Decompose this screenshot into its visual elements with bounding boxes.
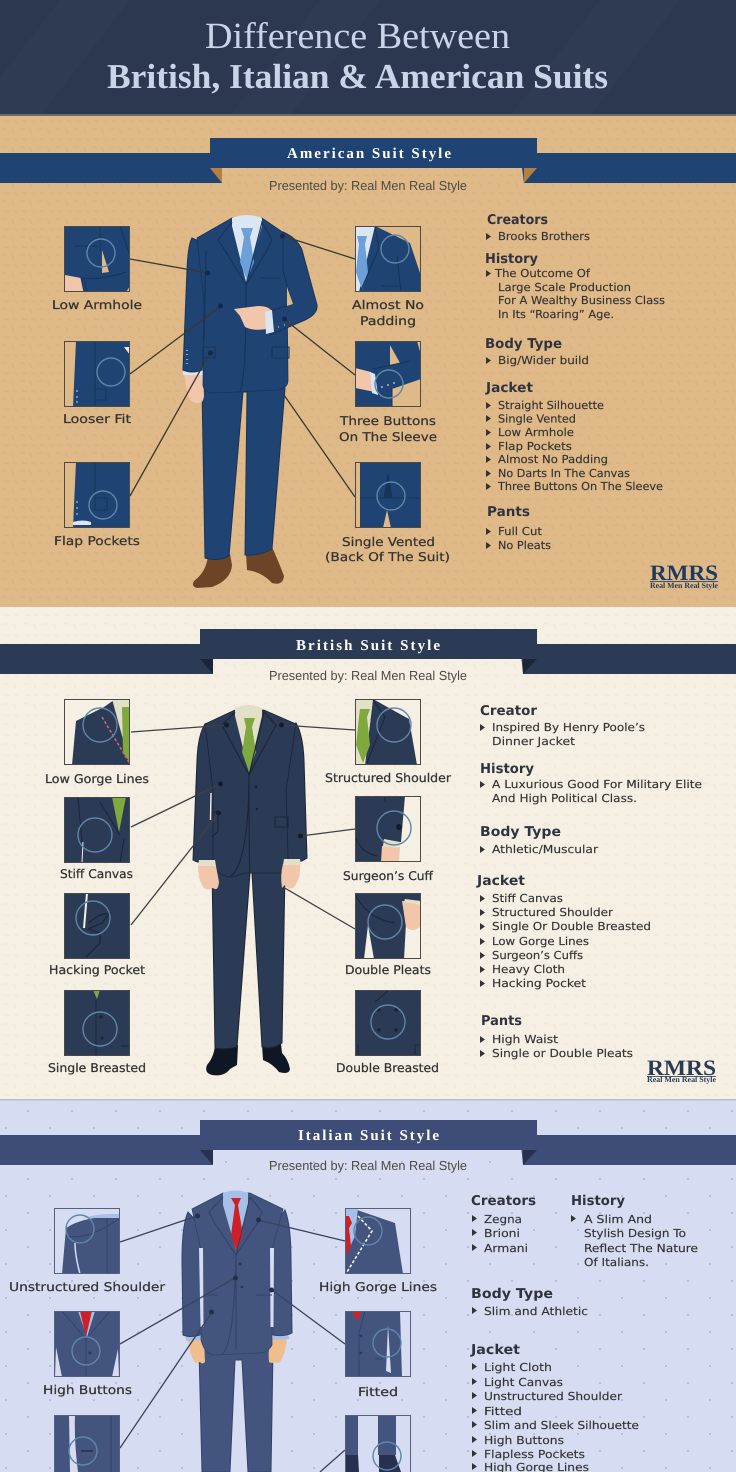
text column: British (476, 703, 702, 1060)
illustration: American suit (183, 215, 317, 588)
history: History (485, 251, 538, 267)
label: Three Buttons: On The Sleeve (339, 430, 437, 444)
ribbon: British: British Suit Style (296, 638, 440, 654)
logo: RMRS: RMRS (650, 560, 718, 585)
thumbnail: Looser Fit (64, 341, 130, 407)
thumbnail: Stiff Canvas (64, 797, 130, 863)
body type (480, 824, 599, 856)
thumbnail: Almost No Padding (355, 226, 421, 292)
thumbnail: Fitted (345, 1311, 411, 1377)
creator (480, 703, 645, 748)
label: Single Breasted: Single Breasted (48, 1061, 146, 1075)
thumbnail: Single Breasted (64, 990, 130, 1056)
ribbon: British (0, 629, 736, 674)
illustration: British suit (193, 705, 307, 1075)
jacket: Jacket (485, 380, 534, 396)
pants: No Pleats (498, 539, 551, 552)
jacket: Single Vented (498, 412, 576, 426)
presented by: Presented by: Real Men Real Style (269, 178, 467, 193)
pants: Pants (481, 1013, 522, 1029)
jacket (485, 380, 663, 493)
body type (471, 1286, 588, 1318)
pants: Full Cut (498, 525, 543, 538)
label: Hacking Pocket: Hacking Pocket (49, 963, 145, 977)
history: In Its “Roaring” Age. (498, 308, 614, 321)
body type: Big/Wider build (498, 354, 589, 367)
thumbnail: trouser break (345, 1415, 411, 1472)
header banner (0, 0, 736, 116)
leader lines: Italian (120, 1214, 345, 1472)
thumbnail: Hacking Pocket (64, 893, 130, 959)
label: Structured Shoulder: Structured Shoulder (325, 771, 451, 785)
thumbnail: Double Pleats (355, 893, 421, 959)
thumbnail: Unstructured Shoulder (54, 1208, 120, 1274)
thumbnail: Flapless Pockets (54, 1415, 120, 1472)
label: Fitted: Fitted (358, 1385, 398, 1399)
label: High Buttons: High Buttons (43, 1383, 132, 1397)
jacket: Surgeon’s Cuffs (492, 949, 583, 962)
presented by: Presented by: Real Men Real Style (269, 1158, 467, 1173)
pants: High Waist (492, 1033, 559, 1046)
label: Double Pleats: Double Pleats (345, 963, 431, 977)
thumbnail: Flap Pockets (64, 462, 130, 528)
creators: Brioni (484, 1227, 520, 1240)
panel: Italian suit style (0, 1099, 736, 1472)
history: History (480, 761, 534, 777)
title: Difference Between (205, 16, 510, 57)
history (480, 761, 702, 805)
logo: RMRS: RMRS (647, 1055, 716, 1080)
pants: Single or Double Pleats (492, 1047, 633, 1060)
jacket: Stiff Canvas (492, 892, 563, 905)
body type: Body Type (480, 824, 561, 840)
jacket: Light Canvas (484, 1376, 563, 1389)
label: Surgeon's Cuff: Surgeon’s Cuff (343, 869, 434, 883)
jacket (470, 1342, 639, 1472)
jacket: Light Cloth (484, 1361, 552, 1374)
creators: Creators (471, 1193, 536, 1209)
jacket (476, 873, 651, 990)
ribbon: American (0, 138, 736, 183)
history (485, 251, 665, 321)
label: Single Vented (325, 535, 450, 564)
creators (486, 212, 590, 243)
jacket: Fitted (484, 1405, 522, 1418)
creators: Zegna (484, 1213, 522, 1226)
body type: Body Type (485, 336, 562, 352)
jacket: Heavy Cloth (492, 963, 565, 976)
history: For A Wealthy Business Class (498, 294, 665, 307)
jacket: Structured Shoulder (492, 906, 614, 919)
label: Looser Fit: Looser Fit (63, 412, 131, 426)
history: Stylish Design To (584, 1227, 686, 1240)
jacket: Single Or Double Breasted (492, 920, 651, 933)
pants (480, 1013, 633, 1060)
jacket: Low Armhole (498, 426, 574, 439)
creators: Armani (484, 1242, 528, 1255)
panel: British suit style (0, 607, 736, 1100)
creator: Inspired By Henry Poole’s (492, 721, 645, 734)
leader lines: American (130, 234, 355, 497)
illustration: Italian suit (182, 1190, 292, 1472)
jacket: Unstructured Shoulder (484, 1390, 623, 1403)
history: The Outcome Of (494, 267, 591, 280)
creators (471, 1193, 536, 1255)
thumbnail: Surgeon's Cuff (355, 796, 421, 862)
thumbnail: Double Breasted (355, 990, 421, 1056)
logo: RMRS: Real Men Real Style (650, 581, 718, 590)
panel: American suit style (0, 116, 736, 607)
jacket: Low Gorge Lines (492, 935, 589, 948)
jacket: Jacket (476, 873, 526, 889)
thumbnail: Structured Shoulder (355, 699, 421, 765)
ribbon: Italian: Italian Suit Style (298, 1128, 439, 1144)
presented by: Presented by: Real Men Real Style (269, 668, 467, 683)
pants: Pants (487, 504, 530, 520)
thumbnail: Low Armhole (64, 226, 130, 292)
history: Large Scale Production (498, 281, 631, 294)
jacket: High Buttons (484, 1434, 564, 1447)
jacket: Jacket (470, 1342, 521, 1358)
creator: Creator (480, 703, 537, 719)
thumbnail: Low Gorge Lines (64, 699, 130, 765)
history: Reflect The Nature (584, 1242, 698, 1255)
history: Of Italians. (584, 1256, 649, 1269)
pants (486, 504, 551, 552)
title (107, 16, 608, 96)
text column: Italian (470, 1193, 698, 1472)
label: Almost No Padding: Padding (360, 314, 416, 328)
label: Almost No Padding (352, 298, 424, 328)
label: Stiff Canvas: Stiff Canvas (60, 867, 133, 881)
thumbnail: Single Vented (355, 462, 421, 528)
ribbon: American: American Suit Style (287, 146, 451, 162)
history: A Luxurious Good For Military Elite (492, 778, 702, 791)
jacket: Three Buttons On The Sleeve (497, 480, 663, 493)
label: Single Vented: (Back Of The Suit) (325, 550, 450, 564)
label: Three Buttons (339, 414, 437, 444)
label: Low Gorge Lines: Low Gorge Lines (45, 772, 149, 786)
jacket: Almost No Padding (498, 453, 608, 466)
jacket: Straight Silhouette (498, 399, 604, 412)
creators: Creators (487, 212, 548, 228)
label: Three Buttons: Three Buttons (339, 414, 436, 428)
ribbon: Italian (0, 1120, 736, 1165)
thumbnail: High Buttons (54, 1311, 120, 1377)
thumbnail: High Gorge Lines (345, 1208, 411, 1274)
body type: Body Type (471, 1286, 553, 1302)
jacket: Flap Pockets (498, 440, 572, 453)
label: Flap Pockets: Flap Pockets (54, 534, 140, 548)
jacket: Hacking Pocket (492, 977, 587, 990)
logo: RMRS: Real Men Real Style (647, 1075, 716, 1084)
title: British, Italian & American Suits (107, 57, 608, 96)
body type: Slim and Athletic (484, 1305, 588, 1318)
body type (485, 336, 589, 367)
creator: Dinner Jacket (492, 735, 576, 748)
body type: Athletic/Muscular (492, 843, 599, 856)
thumbnail: Three Buttons (355, 341, 421, 407)
history: History (571, 1193, 625, 1209)
label: High Gorge Lines: High Gorge Lines (319, 1280, 437, 1294)
history (571, 1193, 698, 1269)
label: Single Vented: Single Vented (342, 535, 435, 549)
jacket: No Darts In The Canvas (498, 467, 630, 480)
label: Double Breasted: Double Breasted (336, 1061, 439, 1075)
leader lines: British (131, 722, 355, 929)
label: Low Armhole: Low Armhole (52, 298, 142, 312)
text column: American (485, 212, 665, 552)
label: Almost No Padding: Almost No (352, 298, 424, 312)
label: Unstructured Shoulder: Unstructured Shoulder (9, 1280, 165, 1294)
creators: Brooks Brothers (498, 230, 590, 243)
history: And High Political Class. (492, 792, 637, 805)
history: A Slim And (584, 1213, 652, 1226)
jacket: Flapless Pockets (484, 1448, 585, 1461)
jacket: Slim and Sleek Silhouette (484, 1419, 639, 1432)
